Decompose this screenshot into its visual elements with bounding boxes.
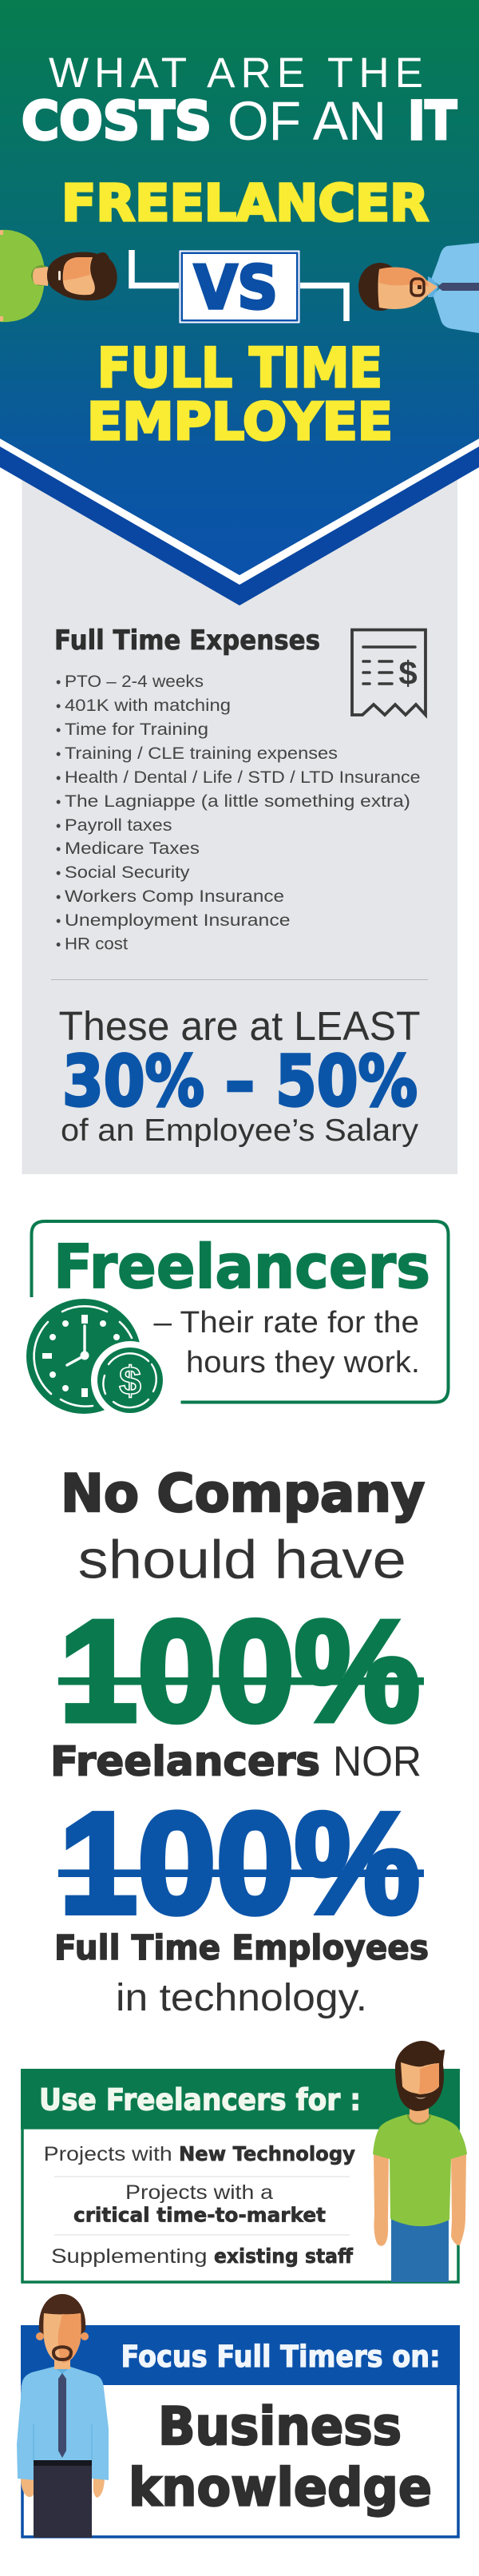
expense list: Workers Comp Insurance bbox=[65, 887, 284, 906]
header banner bbox=[0, 0, 479, 605]
expense list: • bbox=[56, 936, 61, 952]
vs badge: VS bbox=[194, 252, 278, 323]
text: their rate: – Their rate for the bbox=[153, 1306, 419, 1340]
expense list: Payroll taxes bbox=[65, 816, 172, 835]
row: critical time to market: Projects with a bbox=[125, 2181, 273, 2204]
row: existing staff: existing staff bbox=[214, 2245, 354, 2268]
stat: 30% - 50%: 30% – 50% bbox=[62, 1041, 418, 1122]
title: freelancer: FREELANCER bbox=[61, 174, 429, 232]
panel: focus full timers on bbox=[21, 2325, 460, 2537]
panel: use freelancers for bbox=[21, 2069, 460, 2282]
icon: receipt bbox=[352, 629, 426, 715]
icon: freelancer top view bbox=[0, 230, 117, 322]
icon: clock and coin: $ bbox=[119, 1359, 141, 1403]
heading: full time expenses: Full Time Expenses bbox=[54, 625, 320, 657]
expense list: • bbox=[56, 722, 61, 738]
expense list: HR cost bbox=[65, 935, 128, 954]
expense list: • bbox=[56, 865, 61, 881]
text: freelancers nor: NOR bbox=[333, 1738, 422, 1785]
title: costs of an it: COSTS bbox=[22, 90, 212, 152]
title: costs of an it bbox=[22, 90, 457, 152]
heading: no company: No Company bbox=[61, 1464, 425, 1524]
stat: 100% green struck through: 100% bbox=[59, 1591, 420, 1752]
row: existing staff: Supplementing bbox=[51, 2245, 208, 2268]
text: should have: should have bbox=[78, 1530, 406, 1590]
heading: freelancers: Freelancers bbox=[53, 1231, 430, 1302]
vs connector lines bbox=[132, 250, 346, 321]
expense list: • bbox=[56, 889, 61, 905]
panel: freelancers callout bbox=[32, 1221, 449, 1403]
row: new technology bbox=[44, 2142, 355, 2165]
expense list: Unemployment Insurance bbox=[65, 911, 291, 930]
title: costs of an it: IT bbox=[408, 90, 457, 152]
row: new technology: New Technology bbox=[179, 2142, 355, 2165]
expense list: • bbox=[56, 674, 61, 690]
icon: receipt: $ bbox=[398, 654, 418, 692]
panel: full time expenses background bbox=[22, 447, 457, 1174]
expense list: Health / Dental / Life / STD / LTD Insurance bbox=[65, 768, 420, 787]
title: full time: FULL TIME bbox=[97, 337, 382, 400]
expense list: Social Security bbox=[65, 863, 190, 882]
expense list: PTO – 2-4 weeks bbox=[65, 672, 204, 691]
expense list: Training / CLE training expenses bbox=[65, 744, 338, 763]
expense list: Time for Training bbox=[65, 720, 208, 739]
text: business: Business bbox=[158, 2397, 402, 2457]
expense list: • bbox=[56, 818, 61, 834]
expense list: • bbox=[56, 698, 61, 714]
row: critical time to market bbox=[73, 2181, 326, 2227]
panel heading: Use Freelancers for : bbox=[39, 2083, 361, 2118]
expense list: • bbox=[56, 770, 61, 786]
text: of an employee's salary: of an Employee’s Salary bbox=[61, 1113, 419, 1148]
text: knowledge: knowledge bbox=[129, 2459, 432, 2518]
row: new technology: Projects with bbox=[44, 2143, 172, 2165]
illustration: employee man bbox=[17, 2294, 109, 2538]
expense list: The Lagniappe (a little something extra) bbox=[65, 792, 410, 811]
title: costs of an it: OF AN bbox=[228, 90, 386, 152]
icon: employee top view bbox=[358, 243, 479, 333]
row: critical time to market: critical time-to-market bbox=[73, 2203, 326, 2227]
stat: 100% blue struck through: 100% bbox=[59, 1783, 420, 1944]
text: freelancers nor: Freelancers bbox=[50, 1738, 320, 1786]
expense list: Medicare Taxes bbox=[65, 839, 200, 858]
expense list: 401K with matching bbox=[65, 696, 231, 715]
expense list: • bbox=[56, 841, 61, 857]
text: in technology: in technology. bbox=[116, 1977, 367, 2019]
title: employee: EMPLOYEE bbox=[87, 393, 393, 452]
text: these are at least: These are at LEAST bbox=[59, 1003, 420, 1049]
text: full time employees: Full Time Employees bbox=[54, 1928, 429, 1968]
row: existing staff bbox=[51, 2245, 354, 2268]
expense list: • bbox=[56, 913, 61, 929]
expense list: • bbox=[56, 794, 61, 810]
text: hours they work: hours they work. bbox=[186, 1346, 420, 1379]
illustration: freelancer man bbox=[373, 2041, 467, 2282]
panel heading: Focus Full Timers on: bbox=[121, 2340, 441, 2374]
icon: clock and coin bbox=[26, 1299, 169, 1419]
title: what are the: WHAT ARE THE bbox=[49, 50, 423, 97]
expense list bbox=[56, 672, 420, 954]
expense list: • bbox=[56, 746, 61, 762]
